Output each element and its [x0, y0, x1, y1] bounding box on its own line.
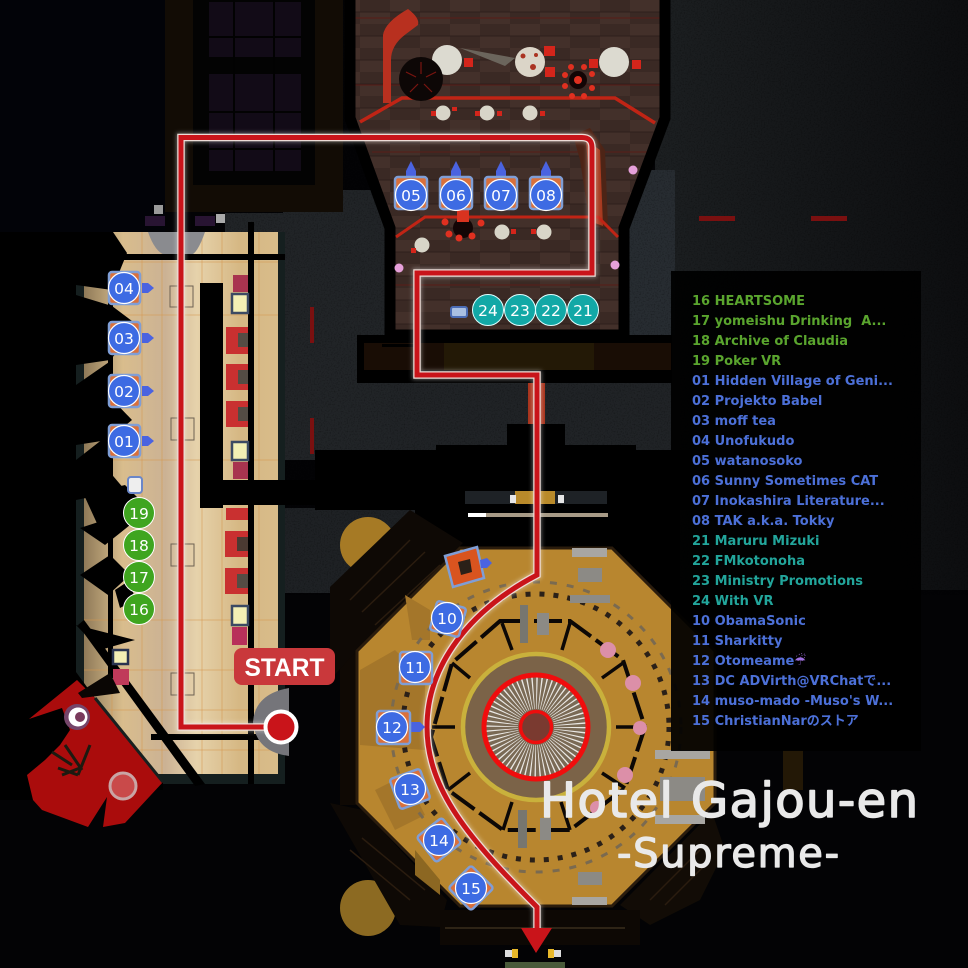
legend: blue group 01-08: 05 watanosoko: [692, 454, 803, 469]
marker 12: 12: [382, 719, 402, 737]
grey semicircle at start: [253, 688, 289, 756]
marker 02: [108, 375, 154, 407]
red carpet corner: [27, 673, 163, 827]
hall floor: [0, 205, 285, 800]
start label: START: [244, 654, 324, 682]
stone texture: [225, 0, 968, 595]
ring of seats: [403, 594, 669, 860]
legend: blue group 01-08: 06 Sunny Sometimes CAT: [692, 474, 878, 489]
legend: blue group 10-15: [692, 614, 893, 729]
marker 15: 15: [461, 880, 481, 898]
marker 01: 01: [114, 433, 134, 451]
marker 22: 22: [541, 302, 561, 320]
legend: blue group 10-15: 13 DC ADVirth@VRChatで...: [692, 674, 891, 689]
legend: teal group: 24 With VR: [692, 594, 773, 609]
marker 05: 05: [401, 187, 421, 205]
legend: green group: [692, 294, 886, 369]
grey tables and benches: [518, 548, 710, 905]
stone ground: above hall: [225, 213, 345, 233]
legend: blue group 01-08: 04 Unofukudo: [692, 434, 794, 449]
legend: blue group 01-08: 07 Inokashira Literature...: [692, 494, 885, 509]
marker 03: 03: [114, 330, 134, 348]
legend: blue group 10-15: 14 muso-mado -Muso's W...: [692, 694, 893, 709]
octagon floor: [357, 548, 715, 906]
window facade: [165, 0, 343, 212]
legend: blue group 10-15: 12 Otomeame☔: [692, 652, 806, 669]
hall walls: [78, 222, 340, 786]
marker 24: 24: [478, 302, 498, 320]
stone ground: right: [655, 0, 968, 590]
marker 13: [389, 768, 431, 810]
exit lamps: [505, 949, 565, 968]
flower planters: [590, 642, 647, 815]
marker 02: 02: [114, 383, 134, 401]
red arch right: [573, 128, 608, 228]
red arch left: [383, 9, 418, 103]
hall benches: [170, 286, 194, 695]
marker 06: [440, 161, 472, 210]
red gear upper: [562, 64, 595, 99]
left darkness: [0, 0, 165, 232]
legend: green group: 19 Poker VR: [692, 354, 781, 369]
subtitle: -Supreme-: [617, 831, 839, 877]
marker 14: 14: [429, 832, 449, 850]
large tables: [432, 45, 641, 77]
dodecagon partitions: [431, 621, 645, 830]
marker 04: [108, 272, 154, 304]
legend: teal group: 22 FMkotonoha: [692, 554, 805, 569]
marker 14: [417, 818, 461, 862]
stone ground: centre: [390, 330, 680, 455]
marker 12: [376, 711, 425, 744]
legend: blue group 01-08: 08 TAK a.k.a. Tokky: [692, 514, 835, 529]
marker 08: [530, 161, 562, 210]
legend: blue group 01-08: 02 Projekto Babel: [692, 394, 822, 409]
marker 13: 13: [400, 781, 420, 799]
orange doorway strip: [528, 383, 545, 424]
marker 23: 23: [510, 302, 530, 320]
markers: booths 10-15: [376, 547, 494, 911]
small booth marker beside 24: [451, 307, 467, 317]
lamps and planters: [113, 275, 248, 685]
marker 11: 11: [405, 659, 425, 677]
marker 08: 08: [536, 187, 556, 205]
small tables: [411, 106, 552, 253]
room floor: [350, 0, 665, 335]
legend: green group: 17 yomeishu Drinking A...: [692, 314, 886, 329]
marker 03: [108, 322, 154, 354]
stone ground: above octagon: [285, 508, 415, 593]
legend: blue group 10-15: 10 ObamaSonic: [692, 614, 806, 629]
lower room band: [357, 335, 672, 383]
marker 19: 19: [129, 505, 149, 523]
marker 16: 16: [129, 601, 149, 619]
markers: booths 01-04: [108, 272, 154, 457]
legend: teal group: [692, 534, 863, 609]
start point: [266, 712, 296, 742]
legend: green group: 18 Archive of Claudia: [692, 334, 848, 349]
black corridor walls: [315, 424, 690, 600]
markers: booths 16-19: [124, 498, 154, 624]
route line: [181, 138, 592, 930]
route arrow head: [521, 928, 552, 953]
marker 15: [448, 865, 494, 911]
legend: blue group 01-08: 01 Hidden Village of Geni...: [692, 374, 893, 389]
marker 10: 10: [437, 610, 457, 628]
marker 18: 18: [129, 537, 149, 555]
marker 07: 07: [491, 187, 511, 205]
octagon surroundings: [330, 510, 803, 945]
start label: [234, 648, 335, 685]
stone ground: blue-grey patch: [625, 170, 675, 335]
legend: blue group 01-08: 03 moff tea: [692, 414, 776, 429]
legend panel: [671, 271, 921, 751]
room walls: [350, 0, 665, 335]
small booth marker above 19: [128, 477, 142, 493]
marker 06: 06: [446, 187, 466, 205]
title: Hotel Gajou-en: [540, 773, 918, 829]
red rugs and tables: [225, 327, 248, 594]
legend: teal group: 21 Maruru Mizuki: [692, 534, 820, 549]
marker 04: 04: [114, 280, 134, 298]
markers: booths 05-08: [395, 161, 562, 210]
legend: blue group 01-08: [692, 374, 893, 529]
black gear: [399, 57, 443, 101]
central fountain: [463, 654, 609, 800]
marker 11: [400, 652, 432, 684]
legend: teal group: 23 Ministry Promotions: [692, 574, 863, 589]
pink flowers: [394, 166, 638, 272]
booth 09 without number: [445, 547, 492, 587]
stone ground: centre left: [283, 190, 393, 460]
shadow wedges: [0, 232, 163, 800]
corridor lamps: [465, 491, 608, 517]
markers: booths 21-24: [472, 294, 598, 326]
red wall marks: [310, 216, 847, 454]
marker 05: [395, 161, 427, 210]
upper room: [350, 0, 665, 335]
legend: blue group 10-15: 11 Sharkitty: [692, 634, 783, 649]
marker 01: [108, 425, 154, 457]
legend: blue group 10-15: 15 ChristianNarのストア: [692, 714, 859, 729]
radial partitions: [432, 623, 645, 830]
marker 07: [485, 161, 517, 210]
marker 17: 17: [129, 569, 149, 587]
marker 21: 21: [573, 302, 593, 320]
floor shade: [360, 650, 425, 750]
railings: [360, 98, 655, 123]
marker 10: [430, 601, 466, 637]
red gear lower: [442, 210, 484, 242]
legend: green group: 16 HEARTSOME: [692, 294, 805, 309]
